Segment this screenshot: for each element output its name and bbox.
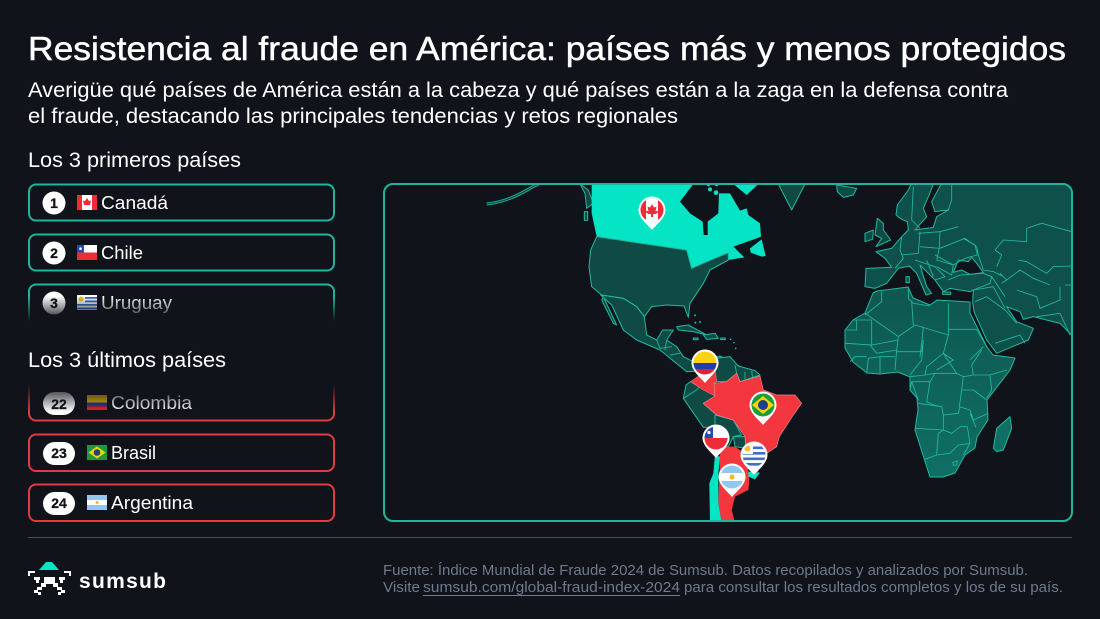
pin: Chile <box>702 424 730 458</box>
row: Colombia (faded): Colombia <box>111 393 193 413</box>
row: Argentina: 24 <box>51 495 67 511</box>
row: Chile: 2 <box>50 245 58 261</box>
row: Brasil: Brasil <box>111 443 156 463</box>
row: Brasil <box>29 434 334 471</box>
row: Colombia (faded) <box>25 384 338 420</box>
map: Eurasia <box>837 180 1087 353</box>
map: Argentina <box>718 447 749 523</box>
pin: Canada <box>638 196 666 230</box>
pin: Brazil <box>750 392 776 425</box>
row: Uruguay (faded) <box>25 284 338 322</box>
map: Uruguay <box>748 472 760 479</box>
row: Canada <box>29 184 334 220</box>
map: Chile <box>709 455 722 523</box>
logo: sumsub <box>28 562 166 595</box>
source note: Fuente: Índice Mundial de Fraude 2024 de Sumsub. Datos recopilados y analizados por Sumsub. <box>383 562 1028 579</box>
source note: para consultar los resultados completos y los de su país. <box>684 580 1063 596</box>
source note: Visite <box>383 580 420 596</box>
row: Chile <box>29 234 334 270</box>
subtitle <box>28 78 1008 128</box>
heading: top 3: Los 3 primeros países <box>28 149 241 172</box>
row: Colombia (faded): 22 <box>51 396 67 412</box>
map: Brazil <box>703 373 802 472</box>
source note: sumsub.com/global-fraud-index-2024 <box>423 580 680 596</box>
row: Uruguay (faded): Uruguay <box>101 293 172 313</box>
row: Chile: Chile <box>101 243 143 263</box>
divider <box>28 537 1072 538</box>
map: Canada <box>592 183 766 268</box>
logo: sumsub: sumsub <box>79 570 166 593</box>
subtitle: Averigüe qué países de América están a la cabeza y qué países están a la zaga en la defensa contra <box>28 78 1008 102</box>
row: Argentina <box>29 484 334 521</box>
row: Canada: Canadá <box>101 193 169 213</box>
map panel <box>384 180 1087 523</box>
pin: Uruguay <box>740 442 768 475</box>
row: Canada: 1 <box>50 195 58 211</box>
map: Colombia <box>691 368 717 396</box>
map: South America <box>683 357 802 523</box>
pin: Argentina <box>718 464 746 497</box>
title: Resistencia al fraude en América: países más y menos protegidos <box>28 30 1066 67</box>
heading: bottom 3: Los 3 últimos países <box>28 349 226 372</box>
row: Argentina: Argentina <box>111 493 194 513</box>
source note <box>383 562 1063 596</box>
row: Brasil: 23 <box>51 445 67 461</box>
subtitle: el fraude, destacando las principales tendencias y retos regionales <box>28 104 678 128</box>
row: Uruguay (faded): 3 <box>50 295 58 311</box>
pin: Colombia <box>692 350 718 383</box>
map: North America <box>487 183 805 372</box>
map: Africa <box>845 287 1015 477</box>
